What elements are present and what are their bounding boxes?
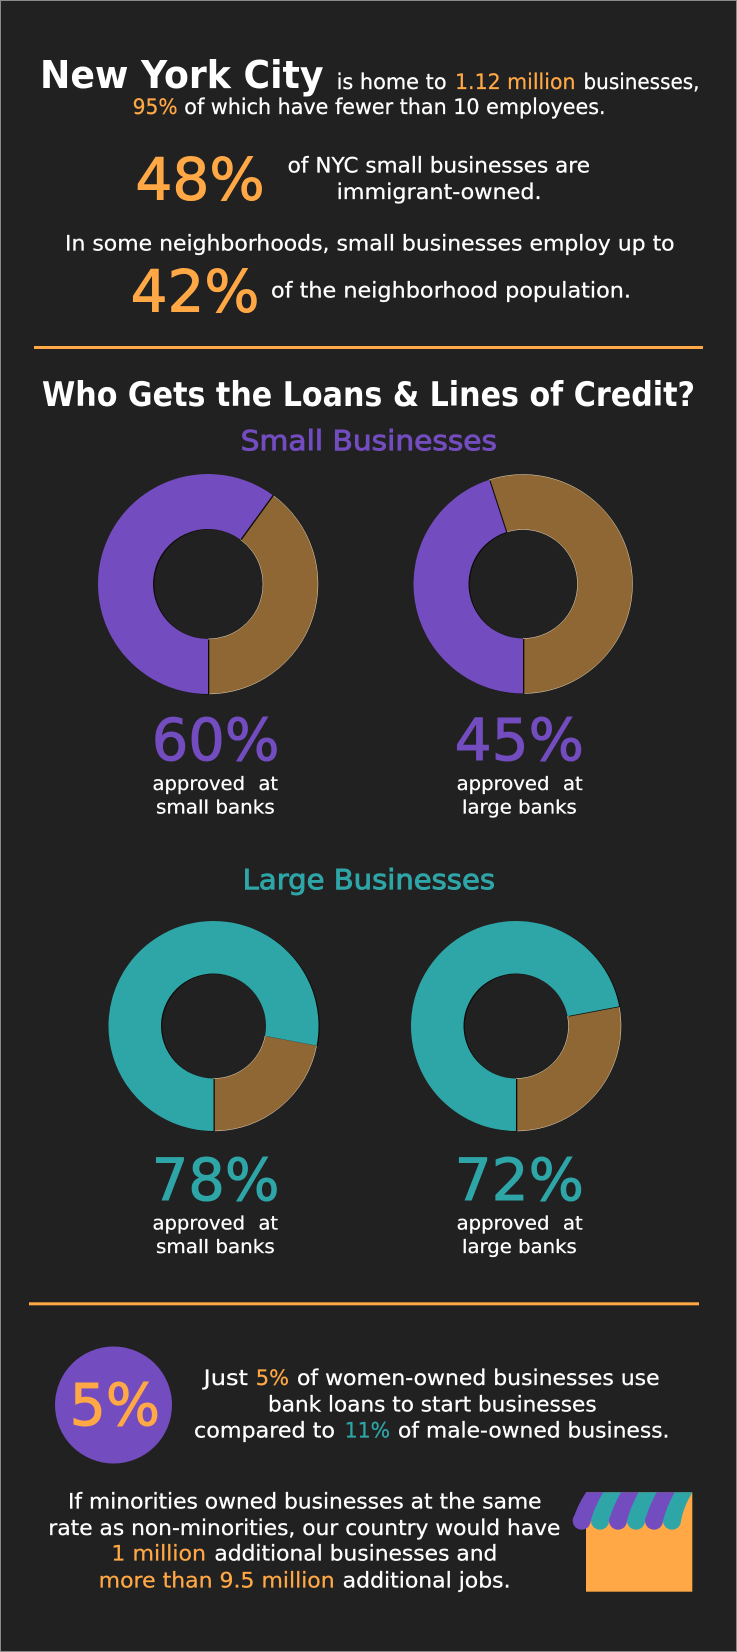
title: New York City headline: New York City [40,53,324,98]
stat: 72 percent large banks: approved [457,1212,550,1234]
text: women-owned comparison: Just [201,1366,248,1391]
text: minority ownership impact: additional jobs. [343,1568,511,1593]
panel: minority-owned businesses [48,1490,692,1593]
stat: 78 percent small banks [152,1147,280,1258]
stat: 60 percent small banks: approved [152,773,245,795]
donut chart: 72 percent approved at large banks [411,921,621,1132]
text: women-owned comparison: compared to [194,1419,335,1444]
text: immigrant-owned: of NYC small businesses are [288,154,590,179]
stat: 78 percent small banks: small banks [156,1236,275,1258]
stat: 45 percent large banks: at [563,773,583,795]
text: neighborhood population: of the neighborhood population. [271,279,631,304]
badge: 5 percent circle [55,1346,172,1464]
panel: small businesses [98,424,632,818]
stat: 45 percent large banks [455,707,584,818]
donut chart: 60 percent approved at small banks [98,474,318,694]
text: business count: 1.12 million [455,70,576,95]
stat: 60 percent small banks: small banks [156,796,275,818]
stat: 78 percent small banks: at [258,1212,278,1234]
subheading: large businesses: Large Businesses [243,863,495,896]
text: neighborhoods employment: In some neighborhoods, small businesses employ up to [65,232,675,257]
stat: 78 percent small banks: approved [152,1212,245,1234]
text: minority ownership impact [48,1490,560,1593]
subheading: small businesses: Small Businesses [241,424,497,457]
text: minority ownership impact: 1 million [111,1542,206,1567]
stat: 45 percent large banks: approved [457,773,550,795]
text: women-owned comparison [194,1366,670,1444]
text: 95 percent fewer than 10 employees: 95% [133,95,178,120]
panel: large businesses [108,863,621,1258]
text: business count: is home to [337,70,447,95]
text: 95 percent fewer than 10 employees: of which have fewer than 10 employees. [184,95,606,120]
text: women-owned comparison: 11% [345,1419,390,1444]
stat: 60 percent small banks: 60% [152,707,280,774]
text: women-owned comparison: of women-owned businesses use [297,1366,660,1391]
stat: 45 percent large banks: large banks [462,796,577,818]
text: minority ownership impact: rate as non-minorities, our country would have [48,1516,560,1541]
stat: 72 percent large banks: large banks [462,1236,577,1258]
stat: 72 percent large banks: at [563,1212,583,1234]
stat: 72 percent large banks: 72% [455,1147,584,1214]
text: immigrant-owned: immigrant-owned. [337,180,542,205]
text: minority ownership impact: more than 9.5 million [99,1568,335,1593]
badge: 5 percent circle: 5% [70,1372,160,1439]
text: minority ownership impact: If minorities owned businesses at the same [68,1490,542,1515]
stat: 60 percent small banks: at [258,773,278,795]
stat: 48 percent: 48% [135,146,265,214]
stat: 78 percent small banks: 78% [152,1147,280,1214]
text: women-owned comparison: 5% [256,1366,289,1391]
panel: NYC intro statistics [40,53,700,326]
donut chart: 78 percent approved at small banks [108,921,320,1132]
text: immigrant-owned [288,154,590,205]
text: minority ownership impact: additional businesses and [214,1542,497,1567]
text: women-owned comparison: bank loans to start businesses [268,1393,597,1418]
text: women-owned comparison: of male-owned business. [398,1419,670,1444]
stat: 42 percent: 42% [131,259,260,326]
stat: 45 percent large banks: 45% [455,707,584,774]
icon: storefront with striped awning [573,1492,692,1592]
text: business count: businesses, [584,70,700,95]
donut chart: 45 percent approved at large banks [413,474,632,694]
stat: 72 percent large banks [455,1147,584,1258]
panel: women-owned businesses [55,1346,670,1464]
stat: 60 percent small banks [152,707,280,818]
